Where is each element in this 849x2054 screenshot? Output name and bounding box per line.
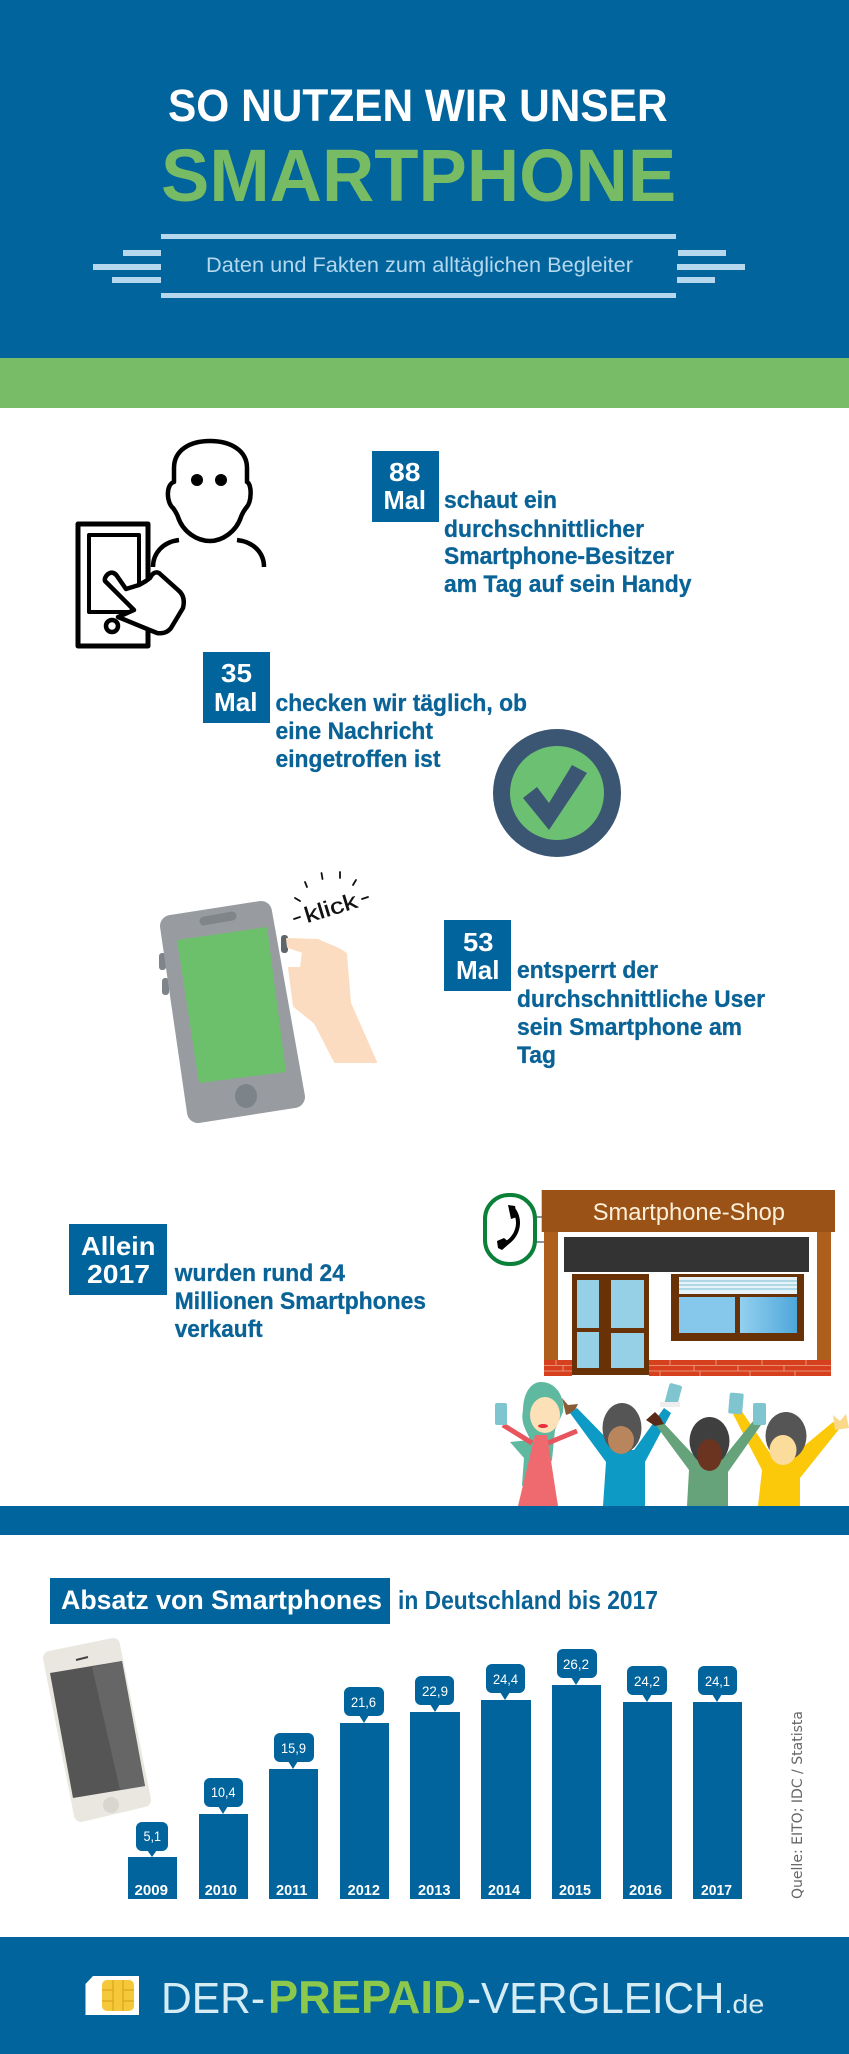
year labels: 2016 (629, 1882, 662, 1899)
footer logo text: .de (724, 1989, 764, 2019)
footer logo text: DER- (161, 1974, 265, 2023)
person: yellow shirt (728, 1392, 849, 1506)
person: red dress (495, 1382, 578, 1506)
text: 35 Mal description: eingetroffen ist (276, 746, 441, 773)
badge: 88 Mal: 88 (389, 457, 420, 487)
subtitle banner (93, 234, 745, 298)
subtitle banner: Daten und Fakten zum alltäglichen Begleiter (206, 254, 633, 277)
icon: white smartphone (50, 1645, 145, 1815)
year labels: 2010 (205, 1882, 237, 1899)
badge: 35 Mal: Mal (214, 687, 258, 717)
value labels: 15,9 (281, 1740, 306, 1756)
value labels: 26,2 (563, 1656, 589, 1672)
shop window (671, 1274, 804, 1341)
chart heading (50, 1578, 658, 1624)
text: 88 Mal description: durchschnittlicher (444, 516, 644, 543)
shop roof sign (542, 1190, 835, 1232)
year labels: 2009 (134, 1882, 168, 1899)
title line 1: SO NUTZEN WIR UNSER (168, 81, 668, 131)
text: 35 Mal description (276, 690, 527, 773)
icon: phone with hand click (159, 872, 376, 1112)
green band (0, 358, 849, 408)
value callouts (136, 1649, 737, 1857)
footer logo text: -VERGLEICH (467, 1974, 724, 2023)
badge: Allein 2017 (69, 1224, 167, 1295)
stat: 53 Mal (444, 920, 765, 1069)
text: 88 Mal description (444, 487, 692, 598)
icon: SIM card (86, 1976, 139, 2015)
value labels: 24,1 (705, 1673, 730, 1689)
label: klick: klick (301, 888, 361, 928)
text: 53 Mal description: entsperrt der (517, 957, 658, 984)
bars (128, 1685, 742, 1899)
stat: 88 Mal (372, 451, 692, 598)
badge: 88 Mal (372, 451, 439, 522)
phone sign (485, 1195, 544, 1264)
person: green shirt (646, 1403, 766, 1506)
value labels (144, 1656, 730, 1844)
text: 53 Mal description: Tag (517, 1042, 556, 1069)
text: 88 Mal description: Smartphone-Besitzer (444, 543, 674, 570)
shop roof sign: Smartphone-Shop (593, 1199, 785, 1226)
illustration: cheering people (495, 1382, 849, 1506)
text: 88 Mal description: schaut ein (444, 487, 557, 514)
badge: 53 Mal (444, 920, 511, 991)
year labels: 2014 (488, 1882, 521, 1899)
text: Allein 2017 description: verkauft (175, 1316, 263, 1343)
icon: person using phone (78, 441, 264, 646)
shop door (572, 1274, 649, 1375)
badge: Allein 2017: 2017 (87, 1259, 150, 1289)
bar chart (128, 1649, 742, 1899)
title line 2: SMARTPHONE (161, 134, 676, 217)
year labels: 2013 (418, 1882, 450, 1899)
year labels (134, 1882, 732, 1899)
badge: 88 Mal: Mal (384, 485, 426, 515)
value labels: 10,4 (211, 1784, 236, 1800)
footer logo text (161, 1971, 764, 2023)
text: Allein 2017 description: wurden rund 24 (174, 1260, 346, 1287)
value labels: 22,9 (422, 1683, 448, 1699)
text: 53 Mal description: sein Smartphone am (517, 1014, 742, 1041)
value labels: 24,4 (493, 1671, 518, 1687)
year labels: 2017 (701, 1882, 732, 1899)
text: Allein 2017 description (174, 1260, 426, 1343)
blue divider band (0, 1506, 849, 1535)
value labels: 21,6 (351, 1694, 376, 1710)
year labels: 2011 (276, 1882, 308, 1899)
person: blue shirt (570, 1383, 682, 1506)
header panel (0, 0, 849, 358)
value labels: 24,2 (634, 1673, 660, 1689)
badge: 35 Mal (203, 652, 270, 723)
year labels: 2015 (559, 1882, 591, 1899)
source note: Quelle: EITO; IDC / Statista (790, 1711, 806, 1899)
chart heading: Absatz von Smartphones (61, 1585, 382, 1615)
footer logo text: PREPAID (268, 1971, 466, 2023)
badge: 53 Mal: 53 (463, 927, 494, 957)
text: 35 Mal description: checken wir täglich, ob (276, 690, 527, 717)
badge: Allein 2017: Allein (81, 1231, 156, 1261)
icon: smartphone shop (485, 1190, 835, 1376)
text: 88 Mal description: am Tag auf sein Handy (444, 571, 692, 598)
footer panel (0, 1937, 849, 2054)
icon: check mark (493, 729, 621, 857)
text: Allein 2017 description: Millionen Smartphones (175, 1288, 426, 1315)
badge: 35 Mal: 35 (221, 658, 252, 688)
label: klick (294, 872, 368, 928)
chart heading: in Deutschland bis 2017 (398, 1585, 658, 1615)
badge: 53 Mal: Mal (456, 955, 500, 985)
stat: Allein 2017 (69, 1224, 426, 1343)
text: 53 Mal description (517, 957, 765, 1069)
text: 53 Mal description: durchschnittliche User (517, 986, 765, 1013)
stat: 35 Mal (203, 652, 527, 773)
value labels: 5,1 (144, 1828, 161, 1844)
text: 35 Mal description: eine Nachricht (276, 718, 433, 745)
year labels: 2012 (348, 1882, 380, 1899)
